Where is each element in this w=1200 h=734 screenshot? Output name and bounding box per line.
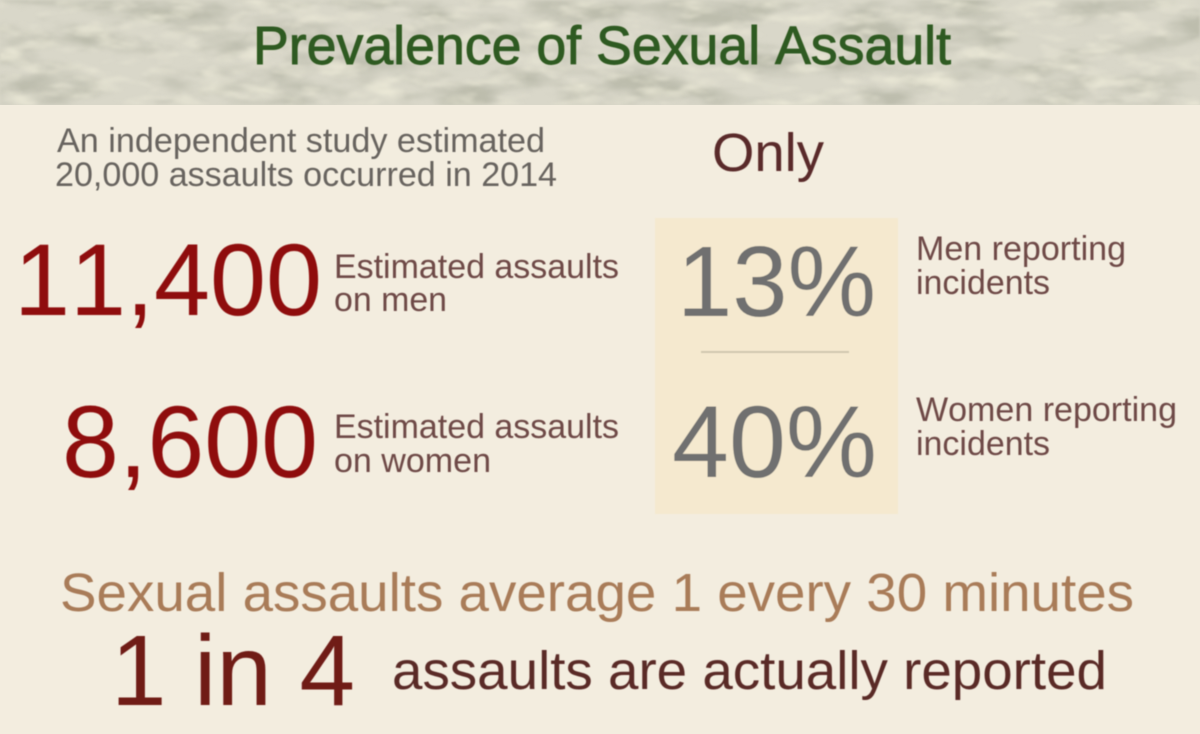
study intro text: 20,000 assaults occurred in 2014	[55, 156, 557, 194]
only label: Only	[712, 123, 824, 183]
label: women reporting	[916, 391, 1177, 463]
stat: 13 percent: 13%	[677, 226, 876, 338]
stat: 40 percent: 40%	[672, 385, 877, 499]
stat: assaults on men: Estimated assaults	[334, 248, 619, 286]
callout: 1 in 4: 1 in 4	[111, 615, 355, 727]
study intro text: An independent study estimated	[57, 122, 545, 160]
label: men reporting	[916, 230, 1126, 302]
stat: assaults on women: Estimated assaults	[334, 408, 619, 446]
label: women reporting: incidents	[916, 425, 1050, 463]
label: men reporting: incidents	[916, 264, 1050, 302]
label: women reporting: Women reporting	[916, 391, 1177, 429]
callout: 1 in 4: assaults are actually reported	[392, 641, 1107, 701]
title: Prevalence of Sexual Assault	[253, 16, 951, 76]
header banner	[0, 0, 1200, 105]
stat: assaults on men	[14, 223, 619, 337]
stat: assaults on men: 11,400	[14, 223, 322, 337]
stat: assaults on women: 8,600	[62, 385, 318, 499]
stat: assaults on women	[62, 385, 619, 499]
callout: 1 in 4	[111, 615, 1107, 727]
stat: assaults on women: on women	[334, 442, 491, 480]
callout: frequency: Sexual assaults average 1 every 30 minutes	[60, 563, 1134, 623]
study intro text	[55, 122, 557, 194]
panel: reporting percentages	[655, 218, 898, 514]
stat: assaults on men: on men	[334, 281, 447, 319]
label: men reporting: Men reporting	[916, 230, 1126, 268]
